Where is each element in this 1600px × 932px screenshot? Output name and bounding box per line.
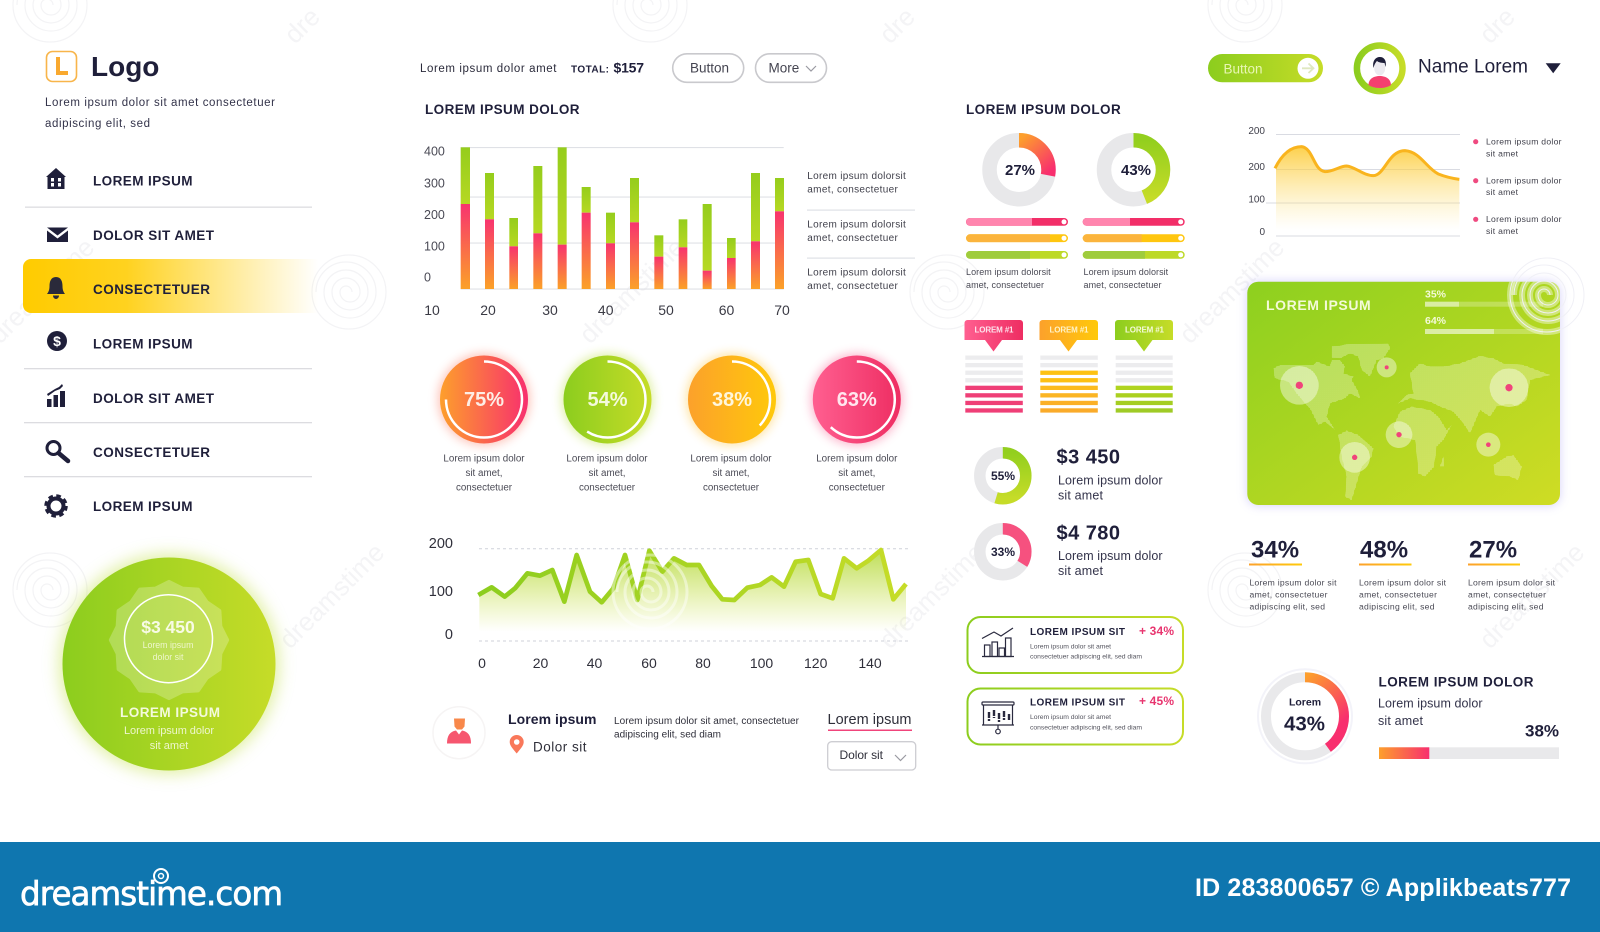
stat 33%	[980, 522, 1162, 578]
circle heading: LOREM IPSUM	[120, 705, 220, 720]
footer banner	[0, 842, 1600, 932]
more dropdown: More	[768, 61, 799, 76]
toolbar label: Lorem ipsum dolor amet	[420, 63, 557, 75]
stat 55%	[980, 446, 1162, 502]
area chart: 200	[429, 536, 453, 552]
icon: dollar: $	[53, 333, 61, 349]
slider pills left: Lorem ipsum dolorsit	[966, 267, 1051, 277]
dropdown select: Dolor sit	[840, 748, 884, 762]
stat 55%: $3 450	[1056, 446, 1120, 468]
progress summary	[1378, 675, 1559, 759]
circle 63%: consectetuer	[829, 482, 886, 494]
stat 48%: 48%	[1360, 537, 1408, 564]
donut 27%	[990, 140, 1048, 199]
tag column orange: LOREM #1	[1050, 325, 1089, 334]
tag column pink	[964, 320, 1023, 413]
circle 38%: Lorem ipsum dolor	[690, 454, 772, 465]
area chart: 120	[804, 655, 828, 671]
stat 34%: amet, consectetuer	[1250, 590, 1328, 600]
icon: mail	[47, 228, 68, 242]
background watermark: dre	[873, 1, 921, 49]
total: TOTAL:	[571, 64, 609, 76]
icon: search	[47, 442, 68, 461]
stat 55%: sit amet	[1058, 488, 1104, 502]
area chart: 0	[478, 655, 486, 671]
bar chart: 100	[424, 240, 445, 254]
bar chart notes: Lorem ipsum dolorsit	[807, 171, 906, 182]
circle 75%: Lorem ipsum dolor	[443, 454, 525, 465]
menu label: CONSECTETUER	[93, 282, 210, 297]
area chart: 20	[533, 655, 548, 671]
logo description: Lorem ipsum dolor sit amet consectetuer	[45, 97, 275, 109]
bar chart notes: amet, consectetuer	[807, 185, 898, 196]
bar chart: 60	[719, 302, 734, 318]
icon: location pin	[510, 735, 524, 754]
circle 63%: 63%	[837, 389, 877, 411]
icon: bell	[47, 277, 65, 299]
card +34%	[968, 617, 1183, 673]
card +45%: consectetuer adipiscing elit, sed diam	[1030, 724, 1142, 731]
heading: donuts: LOREM IPSUM DOLOR	[966, 102, 1121, 117]
gauge 43%: Lorem	[1289, 696, 1321, 708]
progress summary: Lorem ipsum dolor	[1378, 697, 1482, 711]
scalloped badge	[111, 582, 227, 698]
stat 33%: sit amet	[1058, 564, 1104, 578]
stat 48%	[1359, 537, 1447, 612]
circle 54%	[562, 354, 654, 494]
icon: person	[433, 707, 485, 759]
card +34%: Lorem ipsum dolor sit amet	[1030, 643, 1111, 650]
world map panel	[1247, 258, 1584, 506]
area chart: 40	[587, 655, 602, 671]
stat 48%: amet, consectetuer	[1359, 590, 1437, 600]
donut 27%: 27%	[1005, 162, 1035, 179]
slider pills left: amet, consectetuer	[966, 280, 1044, 290]
menu label: LOREM IPSUM	[93, 174, 192, 188]
stat 27%: amet, consectetuer	[1468, 590, 1546, 600]
bar chart notes	[807, 171, 915, 292]
more dropdown	[756, 54, 826, 82]
profile name: Lorem ipsum	[508, 711, 596, 727]
total: $157	[614, 60, 644, 76]
small area chart: 0	[1259, 227, 1265, 238]
menu label: DOLOR SIT AMET	[93, 391, 215, 406]
bar chart	[424, 145, 790, 318]
circle 63%: Lorem ipsum dolor	[816, 454, 898, 465]
dotted world map	[1273, 343, 1550, 500]
circle 54%: consectetuer	[579, 482, 636, 494]
area chart: 80	[695, 655, 711, 671]
background watermark: dreamstime	[573, 232, 690, 349]
progress 35%: 35%	[1425, 288, 1447, 300]
stat 27%: adipiscing elit, sed	[1468, 602, 1544, 612]
circle 38%	[686, 354, 778, 494]
dropdown label: Lorem ipsum	[828, 712, 912, 728]
area chart: 140	[858, 655, 882, 671]
icon: bars	[47, 384, 65, 407]
chart legend: sit amet	[1486, 226, 1519, 236]
small area chart: 200	[1248, 126, 1265, 137]
profile description: Lorem ipsum dolor sit amet, consectetuer	[614, 716, 800, 727]
progress summary: 38%	[1525, 722, 1559, 741]
green balance circle	[59, 554, 279, 774]
card +45%: Lorem ipsum dolor sit amet	[1030, 714, 1111, 721]
bar chart: 50	[658, 302, 674, 318]
menu label: DOLOR SIT AMET	[93, 228, 215, 243]
progress summary: LOREM IPSUM DOLOR	[1378, 675, 1534, 690]
slider pills left	[966, 218, 1068, 290]
bar chart notes: amet, consectetuer	[807, 233, 898, 244]
small area chart	[1248, 126, 1460, 238]
profile row	[433, 707, 916, 770]
progress 64%: 64%	[1425, 315, 1447, 327]
background watermark: dreamstime	[273, 537, 390, 654]
progress 64%	[1425, 315, 1543, 334]
chart legend: sit amet	[1486, 148, 1519, 158]
menu label: LOREM IPSUM	[93, 499, 192, 514]
button	[673, 54, 744, 82]
bar chart: 30	[542, 302, 558, 318]
circle text: Lorem ipsum dolor	[124, 725, 214, 737]
location label: Dolor sit	[533, 740, 587, 755]
dropdown select	[828, 742, 916, 770]
progress 35%	[1425, 288, 1543, 307]
bar chart: 40	[598, 302, 614, 318]
circle 38%: consectetuer	[703, 482, 760, 494]
user name: Name Lorem	[1418, 57, 1528, 78]
gauge 43%: 43%	[1284, 713, 1325, 736]
balance value: $3 450	[141, 617, 195, 637]
bar chart notes: Lorem ipsum dolorsit	[807, 267, 906, 278]
background watermark: dreamstime	[873, 537, 990, 654]
stat 27%: 27%	[1469, 537, 1517, 564]
stat 48%: adipiscing elit, sed	[1359, 602, 1435, 612]
logo block	[45, 51, 275, 130]
bar chart: 0	[424, 271, 431, 285]
card +34%: LOREM IPSUM SIT	[1030, 627, 1125, 638]
stat 55%: Lorem ipsum dolor	[1058, 473, 1162, 487]
tag column orange	[1040, 320, 1098, 413]
chart legend	[1473, 136, 1562, 236]
icon: dollar	[47, 331, 67, 351]
chart legend: Lorem ipsum dolor	[1486, 136, 1562, 146]
circle 75%: consectetuer	[456, 482, 513, 494]
circle text: sit amet	[150, 740, 188, 752]
stat 34%: adipiscing elit, sed	[1250, 602, 1325, 612]
top toolbar	[420, 54, 826, 82]
slider pills right: amet, consectetuer	[1084, 280, 1162, 290]
bar chart: 10	[424, 302, 440, 318]
card +34%: + 34%	[1139, 624, 1174, 638]
circle 63%	[811, 354, 903, 494]
circle 63%: sit amet,	[838, 468, 875, 479]
bar chart notes: Lorem ipsum dolorsit	[807, 219, 906, 230]
area chart: 100	[429, 584, 453, 600]
progress summary: sit amet	[1378, 714, 1424, 728]
bar chart: 400	[424, 145, 445, 159]
menu label: LOREM IPSUM	[93, 336, 192, 352]
stat 55%: 55%	[991, 469, 1015, 483]
bar chart: 300	[424, 177, 445, 191]
icon: gear	[46, 496, 66, 516]
slider pills right	[1083, 218, 1185, 290]
circle 38%: sit amet,	[712, 468, 750, 479]
chart legend: Lorem ipsum dolor	[1486, 175, 1562, 185]
circle 38%: 38%	[712, 389, 752, 411]
panel heading: LOREM IPSUM	[1266, 297, 1371, 313]
tag column pink: LOREM #1	[974, 325, 1014, 334]
icon: presentation board	[982, 702, 1014, 734]
footer logo: dreamstime.com	[20, 875, 283, 913]
chart legend: Lorem ipsum dolor	[1486, 214, 1562, 224]
stat 48%: Lorem ipsum dolor sit	[1359, 578, 1447, 588]
icon: logo L	[46, 52, 76, 82]
gauge 43%	[1258, 669, 1352, 763]
stat 34%: Lorem ipsum dolor sit	[1250, 578, 1337, 588]
background watermark	[0, 0, 1590, 654]
stat 27%	[1468, 537, 1556, 612]
bar chart: 70	[774, 302, 790, 318]
circle 75%	[438, 354, 530, 494]
stat 34%	[1249, 537, 1337, 612]
stat 33%: Lorem ipsum dolor	[1058, 549, 1162, 563]
profile description: adipiscing elit, sed diam	[614, 730, 721, 741]
tag column green: LOREM #1	[1125, 325, 1165, 334]
card +45%: + 45%	[1139, 694, 1174, 708]
area chart: 0	[445, 627, 453, 643]
tag column green	[1115, 320, 1173, 413]
avatar	[1357, 46, 1402, 91]
icon: growth chart	[982, 628, 1014, 656]
menu label: CONSECTETUER	[93, 445, 210, 460]
background watermark: dreamstime	[1473, 537, 1590, 654]
logo description: adipiscing elit, sed	[45, 118, 150, 130]
stat 34%: 34%	[1251, 537, 1299, 564]
stat 27%: Lorem ipsum dolor sit	[1468, 578, 1556, 588]
card +45%	[968, 688, 1183, 744]
map hotspots	[1280, 357, 1528, 473]
icon: home	[46, 168, 66, 189]
card +34%: consectetuer adipiscing elit, sed diam	[1030, 654, 1142, 661]
navigation menu	[23, 168, 318, 516]
footer credit: ID 283800657 © Applikbeats777	[1195, 874, 1571, 902]
background watermark: dre	[278, 1, 326, 49]
circle 75%: sit amet,	[465, 468, 503, 479]
bar chart: 200	[424, 208, 445, 222]
balance caption: Lorem ipsum	[143, 640, 193, 650]
chart legend: sit amet	[1486, 187, 1519, 197]
area chart: 60	[641, 655, 657, 671]
bar chart notes: amet, consectetuer	[807, 281, 898, 292]
circle 54%: 54%	[587, 389, 628, 411]
stat 33%: $4 780	[1056, 522, 1120, 544]
toggle button	[1208, 54, 1323, 82]
donut 43%: 43%	[1121, 162, 1151, 179]
heading: bar chart: LOREM IPSUM DOLOR	[425, 102, 580, 117]
active menu highlight	[23, 259, 318, 313]
card +45%: LOREM IPSUM SIT	[1030, 698, 1125, 709]
small area chart: 100	[1248, 195, 1265, 206]
circle 75%: 75%	[464, 389, 504, 411]
area chart: 100	[750, 655, 773, 671]
background watermark: dreamstime	[1173, 232, 1290, 349]
circle 54%: Lorem ipsum dolor	[566, 454, 648, 465]
donut 43%	[1104, 140, 1163, 199]
percentage circles	[438, 354, 903, 494]
balance caption: dolor sit	[153, 652, 184, 662]
area chart	[429, 536, 908, 671]
background watermark: dre	[1473, 1, 1521, 49]
button: Button	[690, 61, 729, 76]
toggle button: Button	[1224, 61, 1263, 76]
stat 33%: 33%	[991, 545, 1015, 559]
bar chart: 20	[480, 302, 496, 318]
logo wordmark: Logo	[91, 51, 159, 82]
slider pills right: Lorem ipsum dolorsit	[1084, 267, 1169, 277]
small area chart: 200	[1248, 162, 1265, 173]
dropdown triangle	[1546, 63, 1561, 73]
circle 54%: sit amet,	[588, 468, 626, 479]
user profile	[1357, 46, 1561, 91]
